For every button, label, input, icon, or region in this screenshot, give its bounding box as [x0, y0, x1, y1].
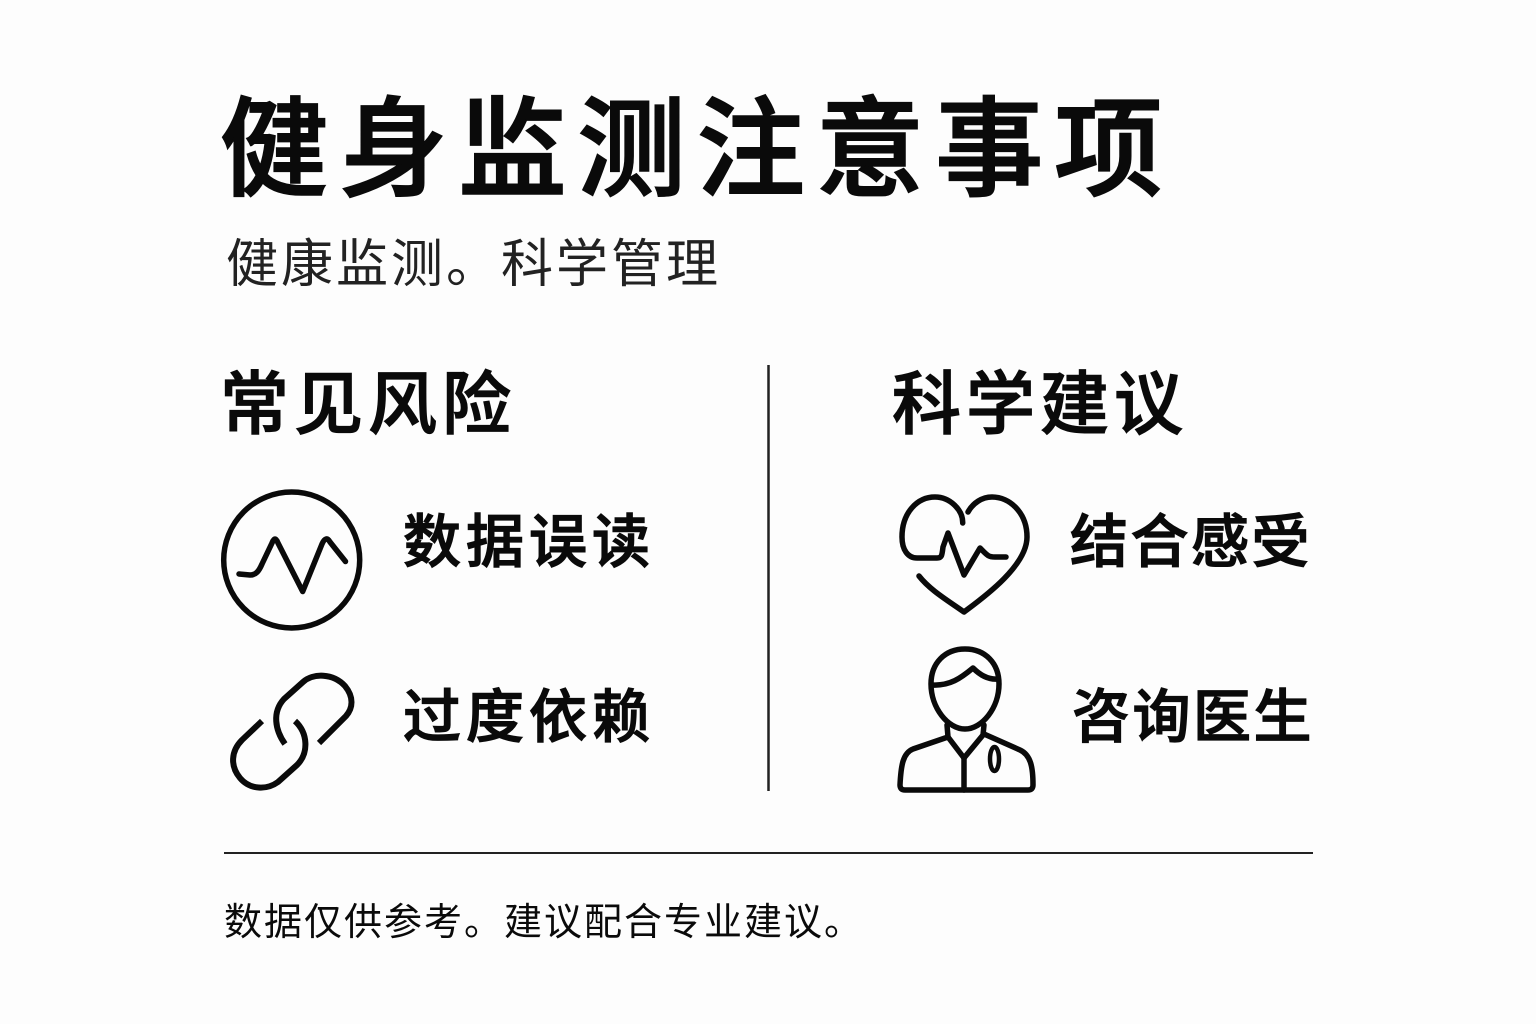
title: 健身监测注意事项: [220, 89, 1174, 210]
icon: heart with pulse: [902, 497, 1027, 612]
icon: chain link: [233, 676, 352, 788]
risk item: data misreading: 数据误读: [403, 510, 655, 575]
heading: common risks: 常见风险: [220, 366, 516, 443]
icon: circle with wave: [224, 492, 360, 628]
heading: scientific advice: 科学建议: [892, 366, 1188, 443]
footer note: 数据仅供参考。建议配合专业建议。: [224, 902, 864, 944]
icon: doctor: [900, 649, 1033, 790]
subtitle: 健康监测。科学管理: [226, 236, 721, 294]
risk item: over-reliance: 过度依赖: [403, 685, 655, 750]
advice item: consult a doctor: 咨询医生: [1072, 685, 1314, 750]
advice item: combine with feelings: 结合感受: [1070, 510, 1312, 575]
